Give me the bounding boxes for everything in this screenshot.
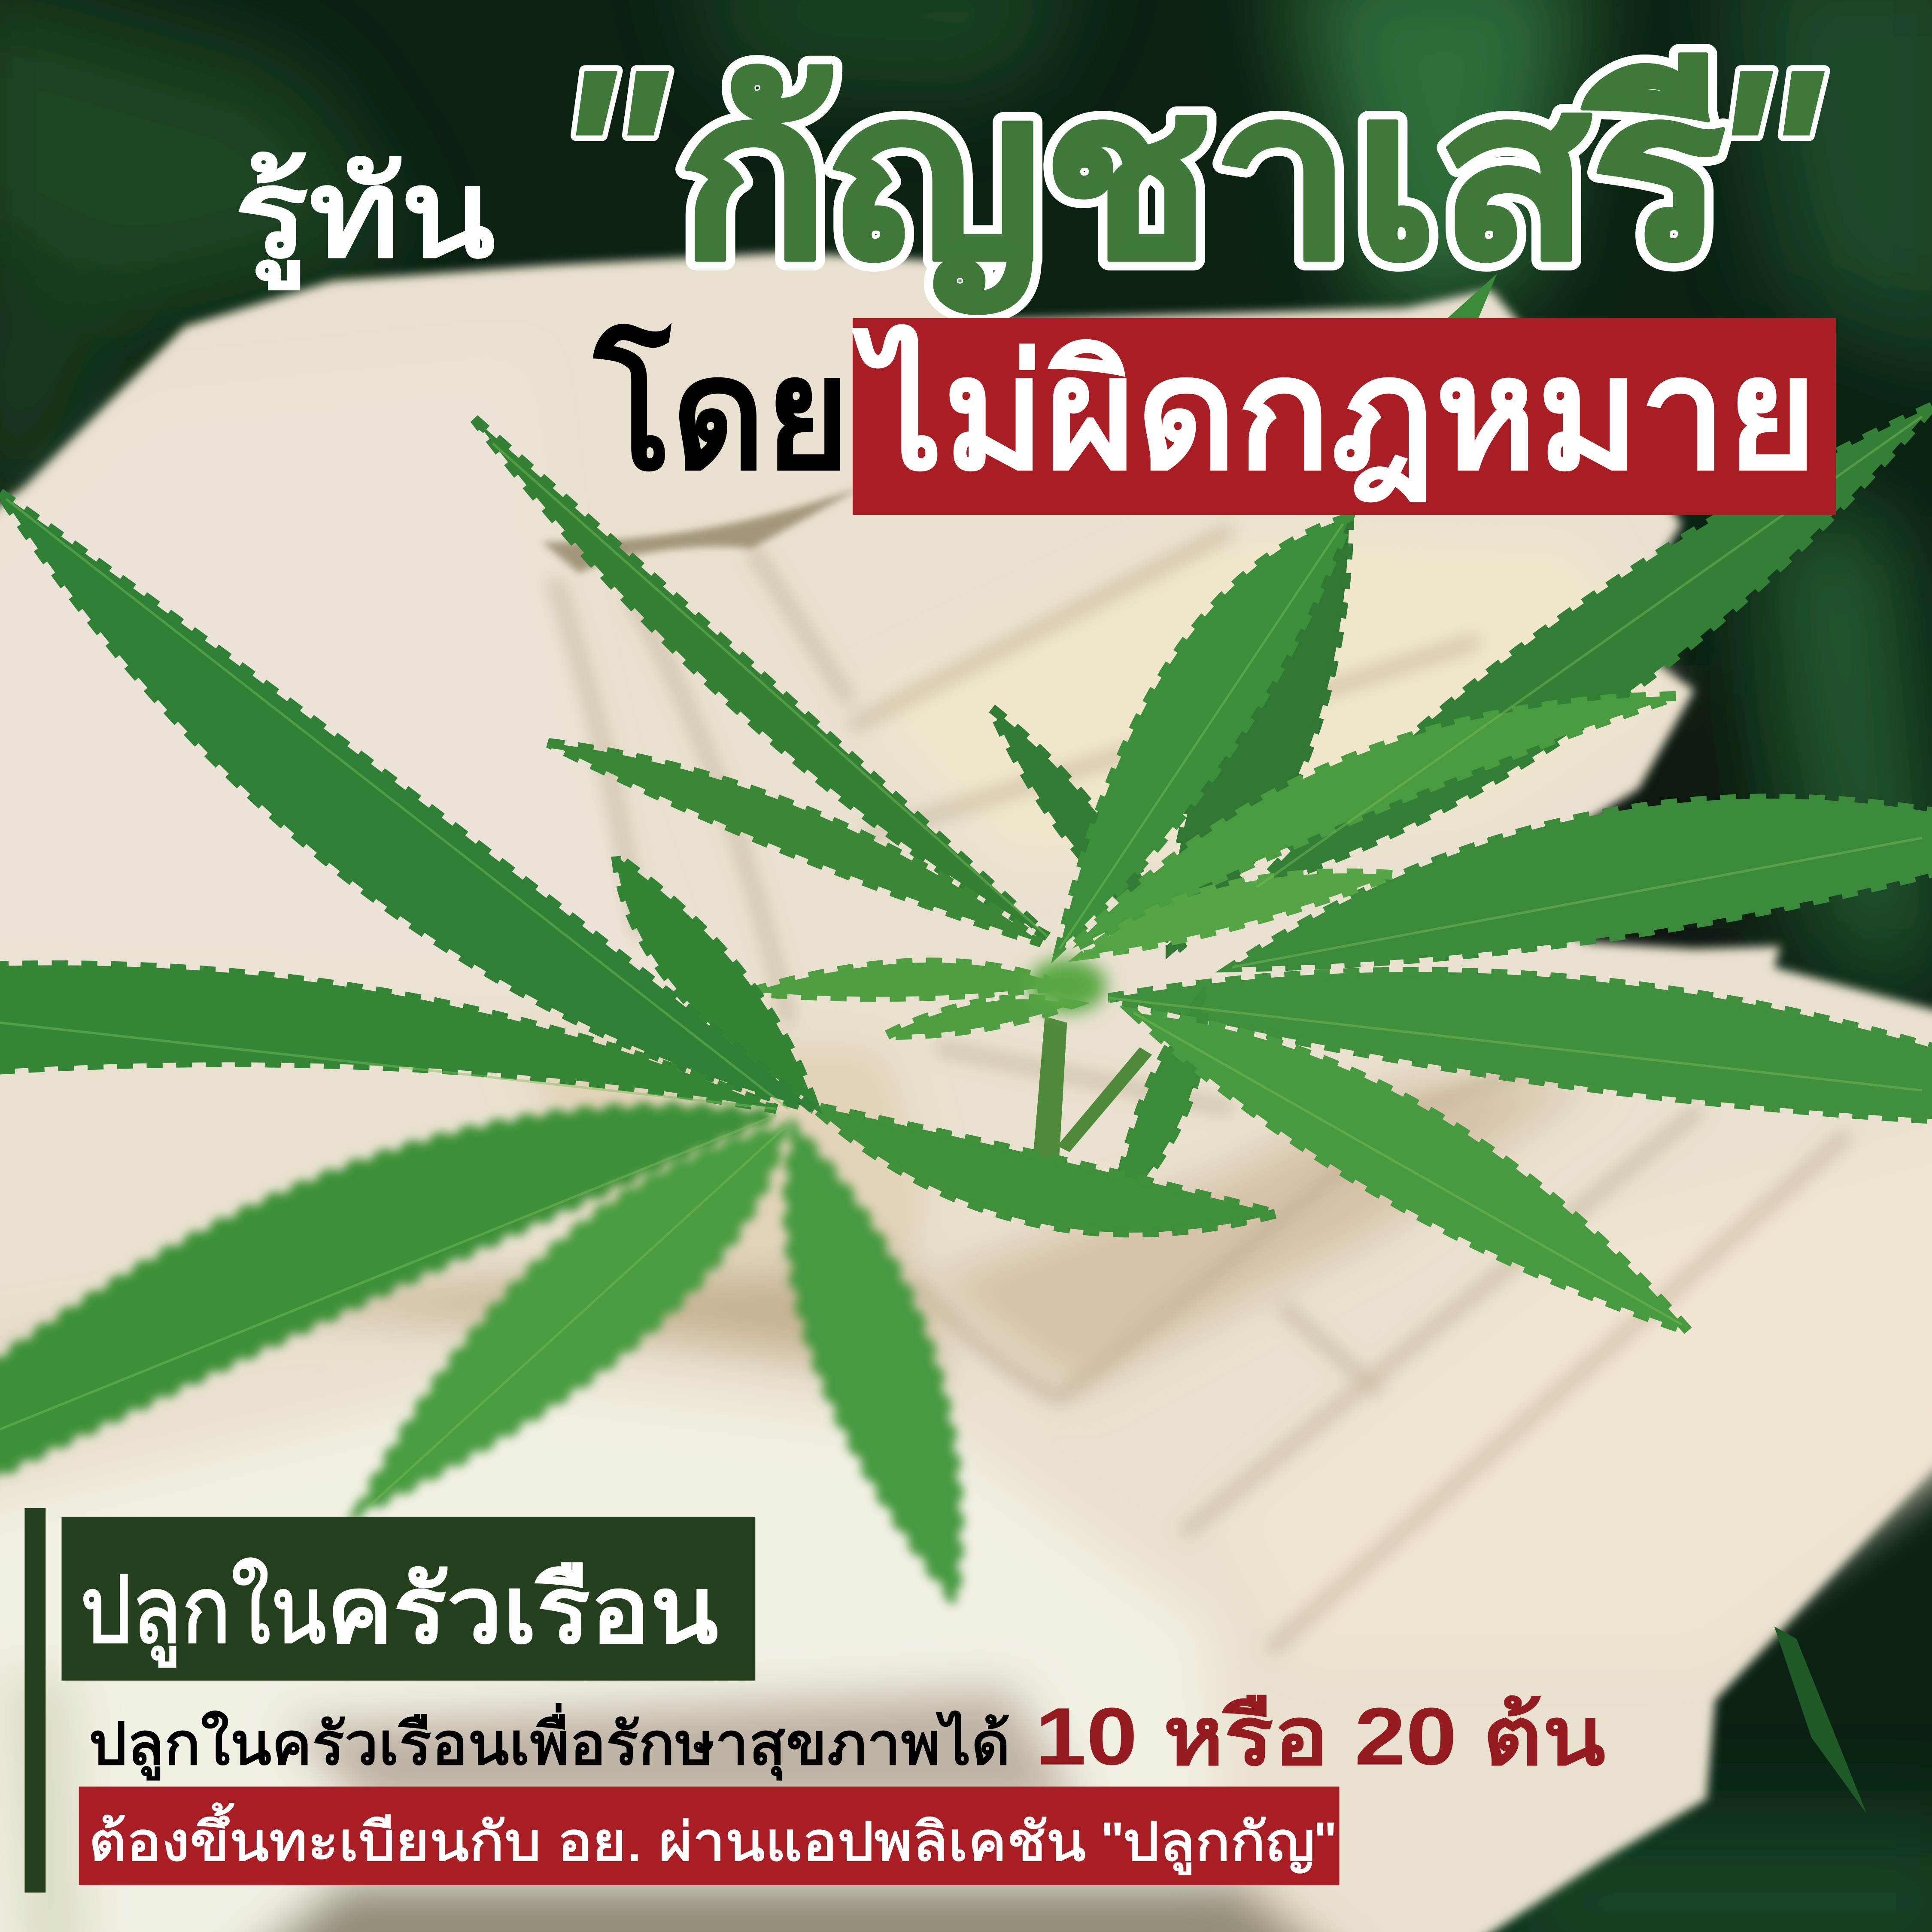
leaflet short mid xyxy=(1084,873,1392,955)
midribs xyxy=(493,416,1922,1324)
leaflet lower xyxy=(357,1127,785,1513)
leaflet left small pair xyxy=(752,963,1072,1035)
section heading: ปลูกในครัวเรือน: ครัวเรือน xyxy=(327,1558,718,1663)
midribs xyxy=(0,499,789,1506)
heading: กัญชาเสรี with quotes: " xyxy=(550,15,669,304)
leaflet upright xyxy=(1060,517,1349,949)
cannabis plant: left blurred leaf xyxy=(0,493,1275,1602)
small leaf top right xyxy=(1448,273,1497,318)
small leaf bottom right xyxy=(1774,1626,1867,1814)
leaflet upper left large xyxy=(0,493,813,1109)
banner: ไม่ผิดกฎหมาย: ไม่ผิดกฎหมาย xyxy=(851,323,1817,503)
side accent bar xyxy=(24,1508,46,1893)
leaflet small back xyxy=(992,708,1183,949)
leaflet back upright xyxy=(1170,517,1349,949)
leaflet down xyxy=(787,1127,959,1602)
body text: home-growing limit: 10 หรือ 20 ต้น xyxy=(1035,1692,1605,1782)
banner: registration note: ต้องขึ้นทะเบียนกับ อย. ผ่านแอปพลิเคชัน "ปลูกกัญ" xyxy=(89,1803,1336,1875)
plant heart xyxy=(1027,959,1106,1013)
leaflet lower left xyxy=(0,1107,776,1491)
leaflet thin right xyxy=(1072,696,1676,949)
heading: โดย: โดย xyxy=(592,320,850,502)
leaflet upper left long xyxy=(474,419,1047,936)
section heading: ปลูกในครัวเรือน: ปลูกใน xyxy=(80,1558,327,1667)
leaflet left xyxy=(548,743,1041,942)
leaflet small upper xyxy=(616,857,813,1103)
cannabis plant: right sprig xyxy=(474,407,1932,1331)
heading: รู้ทัน: รู้ทัน xyxy=(234,145,496,291)
heading: กัญชาเสรี with quotes: กัญชาเสรี xyxy=(677,44,1725,315)
body text: home-growing limit: ปลูกในครัวเรือนเพื่อรักษาสุขภาพได้ xyxy=(89,1704,1010,1780)
stem xyxy=(1030,1017,1152,1193)
heading: กัญชาเสรี with quotes xyxy=(550,15,1825,315)
leaflet upper right xyxy=(1257,407,1932,887)
leaflet small down xyxy=(1115,998,1203,1214)
heading: กัญชาเสรี with quotes: " xyxy=(1705,15,1825,304)
heading: กัญชาเสรี with quotes: กัญชาเสรี xyxy=(677,44,1725,315)
body text: home-growing limit xyxy=(89,1692,1605,1782)
leaflet right xyxy=(1232,799,1932,967)
section heading: ปลูกในครัวเรือน xyxy=(61,1517,755,1681)
leaflet lower right xyxy=(1133,1013,1688,1331)
leaflet right lower xyxy=(1109,972,1932,1121)
banner: registration note xyxy=(79,1786,1340,1885)
leaflet left xyxy=(0,965,776,1109)
leaflet right thin xyxy=(813,1106,1275,1233)
